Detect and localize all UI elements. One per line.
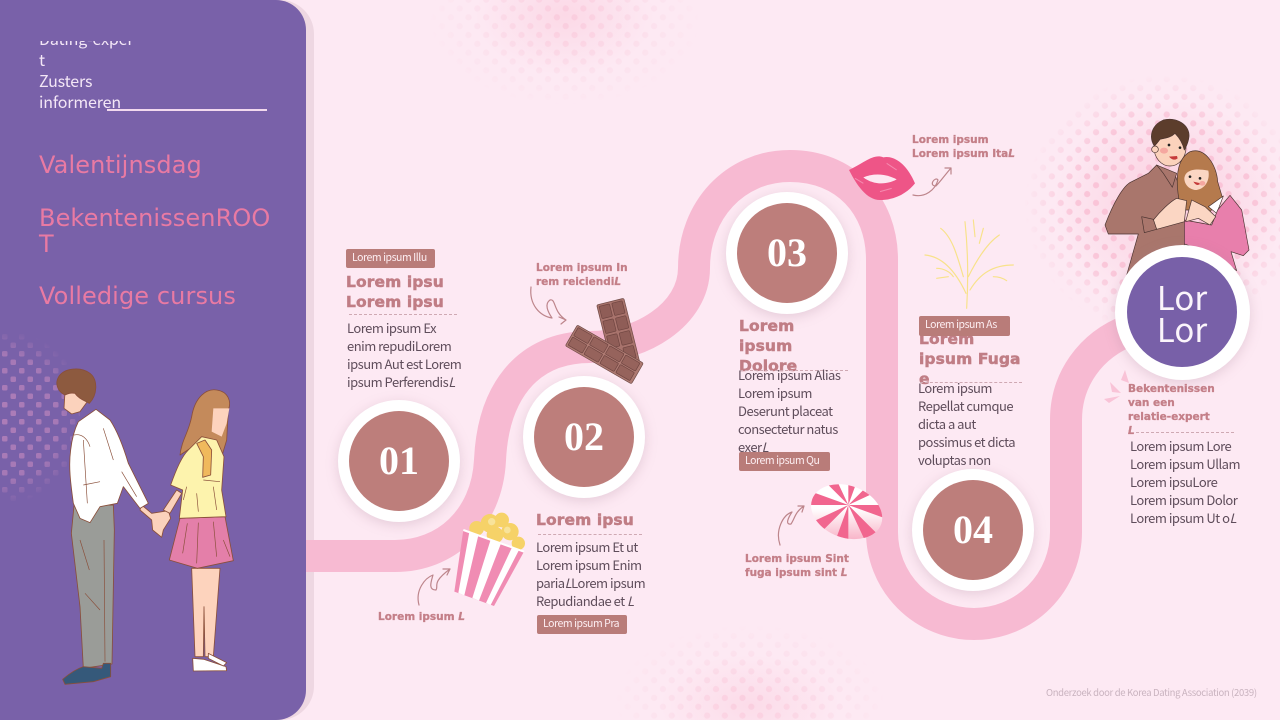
Lor Lor label: Lor xyxy=(1157,272,1207,320)
section 2: pill xyxy=(537,615,627,634)
heading: Bekentenissen ROOT: BekentenissenROO xyxy=(39,204,270,232)
section 2: body xyxy=(536,537,645,610)
section 5: heading xyxy=(1128,383,1215,437)
panel halftone xyxy=(2,334,80,499)
section 5: body: Lorem ipsuLore xyxy=(1130,472,1217,491)
arrow: chocolate xyxy=(531,287,566,324)
circle: Lor Lor xyxy=(1115,245,1250,380)
Lor Lor label: Lor xyxy=(1157,304,1207,352)
section 3: divider xyxy=(740,370,848,371)
number 04: 04 xyxy=(953,507,993,552)
footer source: Onderzoek door de Korea Dating Association (2039) xyxy=(1046,685,1257,699)
section 5: heading: Bekentenissen xyxy=(1128,383,1215,395)
section 2: label: Lorem ipsum In xyxy=(536,262,628,274)
section 2: label: rem reiciendiL xyxy=(536,276,621,288)
section 3: body: Deserunt placeat xyxy=(738,401,833,420)
section 1: body: Lorem ipsum Ex xyxy=(347,318,436,337)
section 2: body: Lorem ipsum Et ut xyxy=(536,537,638,556)
section 4: pill xyxy=(919,316,1010,336)
section 5: divider xyxy=(1136,432,1234,433)
section 5: body: Lorem ipsum Ullam xyxy=(1130,454,1240,473)
lips label: Lorem ipsum ItaL xyxy=(912,148,1015,160)
candy label: fuga ipsum sint L xyxy=(745,567,847,579)
section 3: pill: Lorem ipsum Qu xyxy=(745,453,819,468)
left panel xyxy=(0,0,306,720)
Lor Lor label xyxy=(1127,257,1237,367)
arrow: lips xyxy=(913,168,951,196)
section 5: body: Lorem ipsum Dolor xyxy=(1130,490,1237,509)
number 02: 02 xyxy=(564,414,604,459)
section 3: heading: Dolore xyxy=(739,357,797,375)
section 2: pill: Lorem ipsum Pra xyxy=(543,616,619,631)
popcorn label: Lorem ipsum L xyxy=(378,611,465,623)
arrow: popcorn xyxy=(418,569,450,605)
section 1: body: enim repudiLorem xyxy=(347,336,451,355)
illustration: couple making heart xyxy=(1104,118,1250,276)
section 4: heading: ipsum Fuga xyxy=(919,350,1021,368)
section 3: body: Lorem ipsum Alias xyxy=(738,365,840,384)
section 4: heading xyxy=(919,330,1021,388)
section 3: body: Lorem ipsum xyxy=(738,383,812,402)
circle 04 xyxy=(912,469,1034,591)
section 1: body: ipsum PerferendisL xyxy=(347,372,455,391)
section 1: divider xyxy=(349,314,457,315)
section 4: body: dicta a aut xyxy=(918,414,976,433)
subtitle: clipped text block xyxy=(39,41,133,113)
section 1: heading: Lorem ipsu xyxy=(346,293,444,311)
section 5: body xyxy=(1130,436,1240,527)
section 3: pill xyxy=(739,452,830,471)
section 2: body: pariaLLorem ipsum xyxy=(536,573,645,592)
section 1: body xyxy=(347,318,461,391)
section 5: heading: relatie-expert xyxy=(1128,411,1210,423)
section 1: heading xyxy=(346,273,444,311)
section 4: body: voluptas non xyxy=(918,450,991,469)
section 3: heading: Lorem xyxy=(739,317,794,335)
section 4: heading: e xyxy=(919,370,930,388)
section 3: body: consectetur natus xyxy=(738,419,838,438)
section 2: body: Repudiandae et L xyxy=(536,591,634,610)
section 4: divider xyxy=(920,382,1022,383)
subtitle: clipped text block: informeren xyxy=(39,89,121,113)
arrow: candy xyxy=(778,506,804,545)
number 03 xyxy=(737,203,837,303)
section 3: body: exerL xyxy=(738,437,768,456)
number 02 xyxy=(534,387,634,487)
section 1: pill xyxy=(346,249,435,268)
number 01: 01 xyxy=(379,438,419,483)
section 1: heading: Lorem ipsu xyxy=(346,273,444,291)
section 5: body: Lorem ipsum Ut oL xyxy=(1130,508,1236,527)
candy label xyxy=(745,553,849,579)
section 5: heading: L xyxy=(1128,425,1135,437)
section 1: body: ipsum Aut est Lorem xyxy=(347,354,461,373)
candy label: Lorem ipsum Sint xyxy=(745,553,849,565)
section 4: pill: Lorem ipsum As xyxy=(925,317,997,332)
heading: Bekentenissen ROOT: T xyxy=(39,230,54,258)
section 4: body: possimus et dicta xyxy=(918,432,1015,451)
lips label: Lorem ipsum xyxy=(912,134,989,146)
icon: popcorn box xyxy=(454,512,525,606)
icon: candy xyxy=(811,484,882,540)
illustration: couple holding hands from behind xyxy=(56,368,234,685)
circle 01 xyxy=(338,400,460,522)
panel shadow xyxy=(0,0,314,720)
icon: fireworks xyxy=(924,219,1014,309)
section 3: heading: ipsum xyxy=(739,337,792,355)
subtitle: clipped text block: Zusters xyxy=(39,68,92,92)
icon: lips xyxy=(849,156,915,200)
section 2: body: Lorem ipsum Enim xyxy=(536,555,642,574)
number 01 xyxy=(349,411,449,511)
section 3: body xyxy=(738,365,840,456)
heading: Bekentenissen ROOT xyxy=(38,204,270,258)
section 2: divider xyxy=(538,534,642,535)
circle 02 xyxy=(523,376,645,498)
background layer: halftone patterns and winding road xyxy=(306,0,1280,720)
section 5: heading: van een xyxy=(1128,397,1175,409)
section 1: pill: Lorem ipsum Illu xyxy=(352,250,427,265)
section 3: heading xyxy=(739,317,797,375)
icon: chocolate bar xyxy=(566,298,644,384)
number 03: 03 xyxy=(767,230,807,275)
icon: small burst xyxy=(1104,370,1129,403)
circle 03 xyxy=(726,192,848,314)
section 4: body xyxy=(918,378,1015,469)
heading: Volledige cursus: Volledige cursus xyxy=(39,282,236,310)
section 5: body: Lorem ipsum Lore xyxy=(1130,436,1231,455)
lips label xyxy=(912,134,1015,160)
subtitle underline xyxy=(107,109,267,111)
section 2: label xyxy=(536,262,628,288)
section 4: body: Lorem ipsum xyxy=(918,378,992,397)
section 4: heading: Lorem xyxy=(919,330,974,348)
section 4: body: Repellat cumque xyxy=(918,396,1013,415)
section 2: heading: Lorem ipsu xyxy=(536,511,634,529)
subtitle: clipped text block: t xyxy=(39,47,45,71)
number 04 xyxy=(923,480,1023,580)
heading: Valentijnsdag: Valentijnsdag xyxy=(39,151,202,179)
